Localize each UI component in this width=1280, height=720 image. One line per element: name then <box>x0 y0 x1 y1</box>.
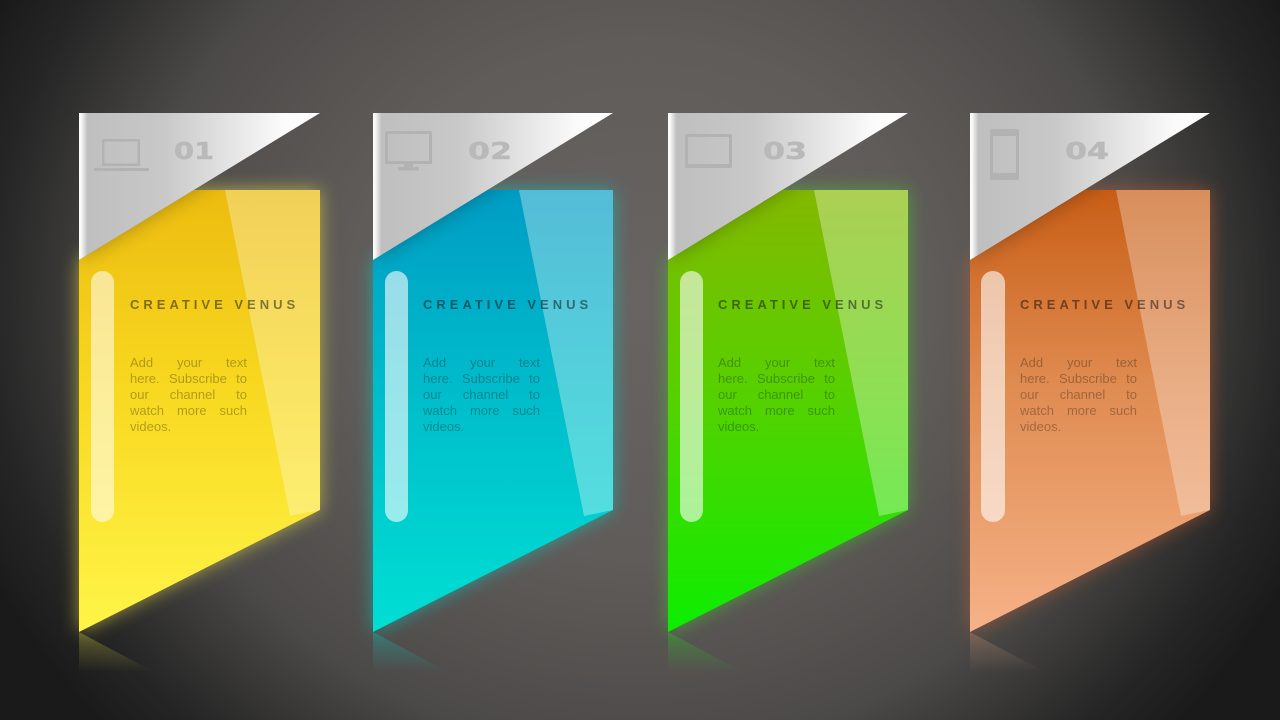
coloured body <box>373 190 613 632</box>
glow <box>79 190 320 632</box>
body text: videos. <box>423 419 464 434</box>
body text <box>1020 355 1137 434</box>
body text: Add your text <box>130 355 247 370</box>
body text: watch more such <box>718 403 835 418</box>
body text: here. Subscribe to <box>1020 371 1137 386</box>
shadow under triangle <box>668 190 800 262</box>
panel: card 03 green <box>658 113 918 664</box>
body text: Add your text <box>718 355 835 370</box>
icon: monitor <box>385 131 432 170</box>
icon: phone <box>990 129 1019 180</box>
reflection <box>79 632 154 672</box>
body text: our channel to <box>423 387 540 402</box>
glow <box>970 190 1210 632</box>
body text: here. Subscribe to <box>718 371 835 386</box>
icon: tablet <box>685 134 732 168</box>
body text: Add your text <box>423 355 540 370</box>
body text: watch more such <box>1020 403 1137 418</box>
body text: videos. <box>130 419 171 434</box>
body text: our channel to <box>718 387 835 402</box>
top triangle <box>79 113 320 260</box>
pill bar <box>981 271 1005 522</box>
pill bar <box>91 271 114 522</box>
heading: CREATIVE VENUS <box>718 297 887 312</box>
top triangle <box>668 113 908 260</box>
number 01: 01 <box>174 139 214 165</box>
heading: CREATIVE VENUS <box>1020 297 1189 312</box>
body text: watch more such <box>423 403 540 418</box>
glow <box>373 190 613 632</box>
glow <box>668 190 908 632</box>
top triangle <box>970 113 1210 260</box>
coloured body <box>79 190 320 632</box>
number 04: 04 <box>1065 139 1109 165</box>
panel: card 02 blue <box>362 113 622 664</box>
shadow under triangle <box>79 190 215 264</box>
pill bar <box>385 271 408 522</box>
reflection <box>970 632 1045 672</box>
gloss highlight <box>519 190 613 516</box>
pill bar <box>680 271 703 522</box>
number 02: 02 <box>468 139 512 165</box>
shadow under triangle <box>970 190 1103 263</box>
body text <box>423 355 540 434</box>
body text: watch more such <box>130 403 247 418</box>
body text: videos. <box>718 419 759 434</box>
body text: Add your text <box>1020 355 1137 370</box>
body text: videos. <box>1020 419 1061 434</box>
coloured body <box>970 190 1210 632</box>
icon: laptop <box>94 139 149 171</box>
shadow under triangle <box>373 190 506 262</box>
body text <box>130 355 247 434</box>
panel: card 01 yellow <box>66 113 332 666</box>
reflection <box>373 632 448 672</box>
gloss highlight <box>814 190 908 516</box>
top triangle <box>373 113 613 260</box>
gloss highlight <box>225 190 320 516</box>
body text: our channel to <box>1020 387 1137 402</box>
gloss highlight <box>1116 190 1210 516</box>
heading: CREATIVE VENUS <box>130 297 299 312</box>
body text: here. Subscribe to <box>130 371 247 386</box>
body text: our channel to <box>130 387 247 402</box>
reflection <box>668 632 743 672</box>
coloured body <box>668 190 908 632</box>
panel: card 04 orange <box>960 113 1221 665</box>
body text <box>718 355 835 434</box>
number 03: 03 <box>763 139 807 165</box>
body text: here. Subscribe to <box>423 371 540 386</box>
heading: CREATIVE VENUS <box>423 297 592 312</box>
